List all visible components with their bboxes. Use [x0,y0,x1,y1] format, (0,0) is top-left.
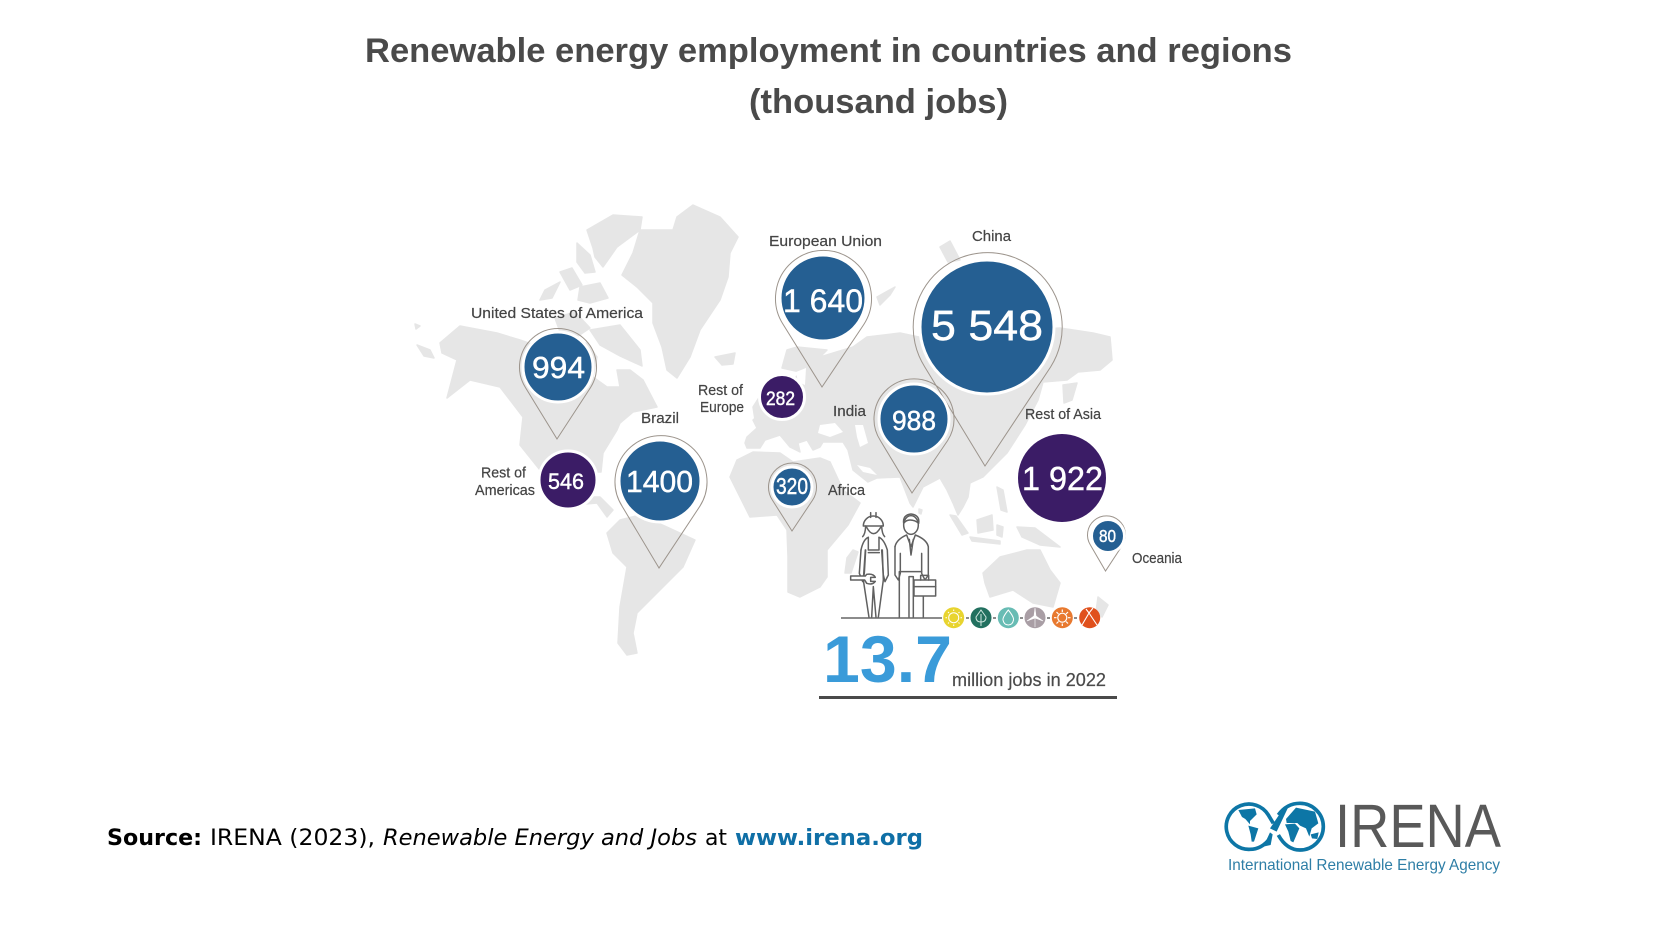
label: Oceania: Oceania [1132,550,1183,567]
label: Africa: Africa [828,482,866,499]
pin: European Union [775,250,871,387]
source line: Source: [107,826,202,851]
source line [107,826,923,851]
pin: European Union: 1 640 [783,283,863,319]
pin: United States of America: 994 [532,350,585,385]
headline number: 13.7 [823,622,952,696]
icon row: renewable energy technologies [943,607,1100,628]
pin: India: 988 [892,405,936,436]
icon: solar [943,607,964,628]
title: (thousand jobs) [749,83,1008,121]
icon: bioenergy leaf [970,607,992,628]
bubble: Rest of Europe: 282 [766,389,795,410]
headline number [823,622,1106,696]
icon: hydropower drop [998,607,1019,628]
label: Rest of Europe: Rest of [698,382,744,399]
label: Rest of Americas: Americas [475,482,535,499]
label: Rest of Europe [698,382,744,416]
label: China: China [972,228,1012,245]
ground line [841,617,942,619]
title: Renewable energy employment in countries and regions [365,32,1292,70]
logo wordmark: IRENA [1335,792,1501,860]
logo tagline: International Renewable Energy Agency [1228,857,1500,874]
label: India: India [833,403,867,420]
source line: Renewable Energy and Jobs [383,826,697,851]
source line: at [705,826,727,851]
label: Rest of Americas [475,464,535,499]
label: Rest of Europe: Europe [700,399,744,416]
headline underline [819,696,1117,699]
pin: China: 5 548 [931,302,1043,350]
icon: wind turbine [1024,607,1046,628]
icon: geothermal [1079,607,1100,628]
pin: Oceania [1088,516,1126,571]
bubble: Rest of Asia [1018,434,1106,522]
logo mark: infinity globes [1226,803,1323,850]
pin: Africa: 320 [776,473,808,499]
pin: Oceania: 80 [1099,526,1116,546]
label: Rest of Asia: Rest of Asia [1025,406,1102,423]
pin: India [874,379,954,493]
icon: solar thermal [1052,607,1073,628]
title [365,32,1292,121]
label: United States of America: United States of America [471,305,644,322]
label: European Union: European Union [769,233,882,250]
workers illustration [851,513,936,617]
label: Brazil: Brazil [641,410,679,427]
bubble: Rest of Americas [539,451,597,509]
pin: Brazil: 1400 [626,464,693,499]
pin: China [913,253,1062,466]
source line: www.irena.org [735,826,923,851]
headline number: million jobs in 2022 [952,670,1106,690]
pin: United States of America [520,328,596,439]
IRENA logo [1226,792,1501,874]
source line: IRENA (2023), [210,826,375,851]
world map [415,205,1112,655]
bubble: Rest of Asia: 1 922 [1022,460,1103,497]
inland seas [796,368,877,475]
bubble: Rest of Europe [760,374,804,420]
pin: Africa [769,463,817,531]
label: Rest of Americas: Rest of [481,464,527,482]
bubble: Rest of Americas: 546 [548,469,584,494]
pin: Brazil [615,436,707,568]
